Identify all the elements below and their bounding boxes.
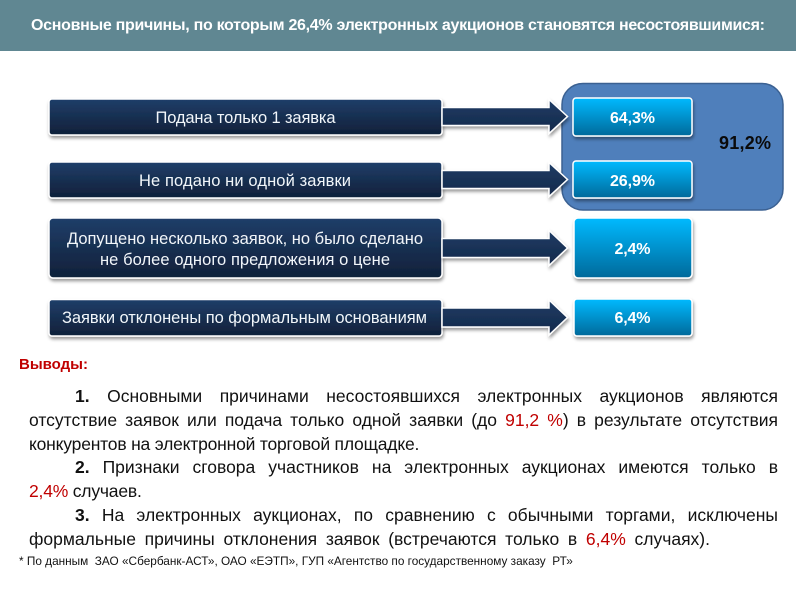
row 3: several applications, one price offer: не более одного предложения о цене [100, 251, 390, 269]
row 3: several applications, one price offer: Допущено несколько заявок, но было сделано [67, 230, 423, 248]
text block: conclusions list [29, 386, 778, 549]
row 3: several applications, one price offer: 2,4% [614, 241, 650, 258]
header band: Основные причины, по которым 26,4% электронных аукционов становятся несостоявшимися: [31, 17, 765, 34]
heading: conclusions: Выводы: [19, 356, 88, 373]
text block: conclusions list: формальные причины отклонения заявок (встречаются только в 6,4% случаях). [29, 529, 710, 549]
row 4: formal rejections: 6,4% [614, 310, 650, 327]
text block: conclusions list: 3. На электронных аукционах, по сравнению с обычными торгами, исключены [75, 505, 778, 525]
row 1: one application [49, 98, 692, 136]
row 2: no applications [49, 161, 692, 198]
row 1: one application: 64,3% [610, 110, 655, 127]
row 2: no applications: 26,9% [610, 173, 655, 190]
text block: conclusions list: конкурентов на электронной торговой площадке. [29, 434, 419, 454]
footnote: data sources: * По данным ЗАО «Сбербанк-АСТ», ОАО «ЕЭТП», ГУП «Агентство по государственному заказу РТ» [19, 554, 573, 568]
text block: conclusions list: отсутствие заявок или подача только одной заявки (до 91,2 %) в результате отсутствия [29, 410, 778, 430]
header band [0, 0, 796, 51]
row 4: formal rejections [49, 299, 692, 336]
panel: combined 91,2% group: 91,2% [719, 133, 771, 153]
text block: conclusions list: 2. Признаки сговора участников на электронных аукционах имеются только в [75, 457, 778, 477]
row 4: formal rejections: Заявки отклонены по формальным основаниям [62, 309, 427, 327]
text block: conclusions list: 2,4% случаев. [29, 481, 142, 501]
panel: combined 91,2% group [562, 84, 783, 210]
row 1: one application: Подана только 1 заявка [156, 109, 336, 127]
row 2: no applications: Не подано ни одной заявки [139, 172, 351, 190]
row 3: several applications, one price offer [49, 218, 692, 278]
text block: conclusions list: 1. Основными причинами несостоявшихся электронных аукционов являются [75, 386, 778, 406]
